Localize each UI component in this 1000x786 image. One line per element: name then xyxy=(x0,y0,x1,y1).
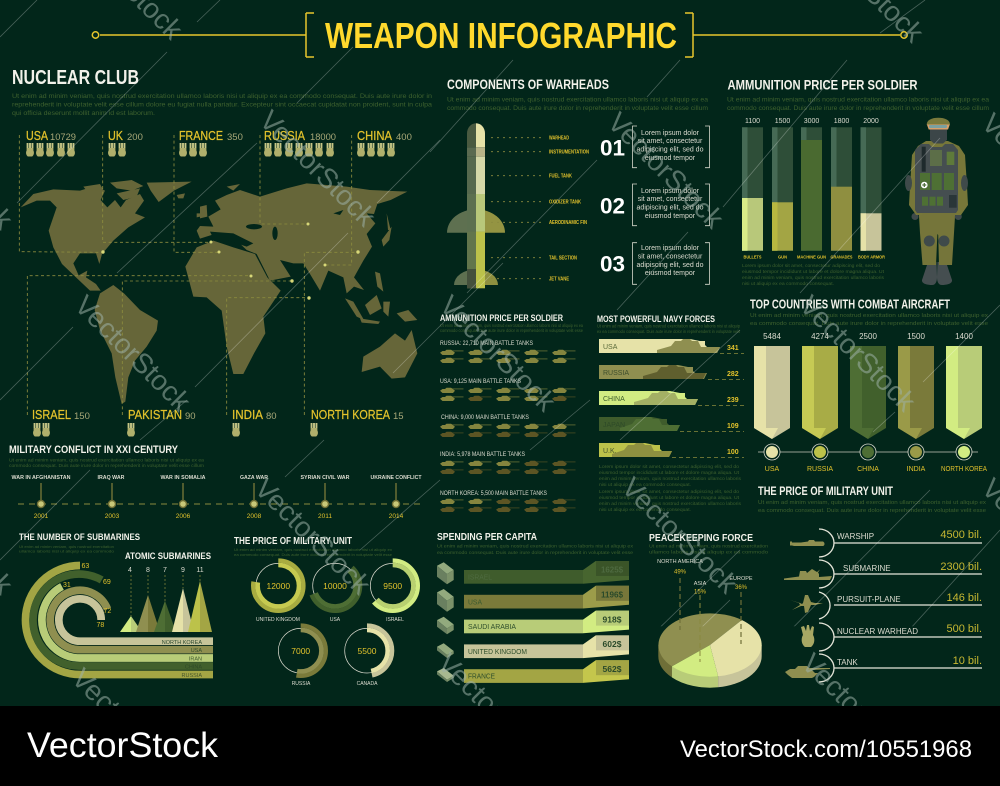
numbered callouts: Lorem ipsum dolor xyxy=(641,245,700,252)
donut: Israel: 9500 xyxy=(383,581,402,591)
nested arc chart: 78 xyxy=(96,622,104,629)
donut: Israel xyxy=(368,561,418,623)
label: France: 350 xyxy=(227,132,243,143)
label: Pakistan: 90 xyxy=(185,411,196,422)
row: USA: 1196$ xyxy=(601,590,623,600)
navy bar: China: 239 xyxy=(727,397,739,404)
navy bar: Japan: JAPAN xyxy=(603,422,625,429)
donut: Israel: ISRAEL xyxy=(386,617,404,623)
label: India: 80 xyxy=(266,411,277,422)
tank row: China: CHINA: 9,000 MAIN BATTLE TANKS xyxy=(441,415,529,421)
heading: THE PRICE OF MILITARY UNIT xyxy=(758,484,894,498)
text block: Ut enim ad minim veniam, quis nostrud exercitation ullamco laboris nisi ut aliquip ex ea xyxy=(447,98,709,104)
text block: navy notes: eiusmod tempor incididunt ut labore et dolore magna aliqua. Ut xyxy=(599,470,740,476)
triangle chart: 9 xyxy=(181,567,185,574)
nested arc chart xyxy=(25,563,213,679)
text block: Ut enim ad minim veniam, quis nostrud exercitation ullamco laboris nisi ut aliquip ex xyxy=(234,547,392,552)
donut: Canada xyxy=(342,626,392,687)
panel: military conflict timeline xyxy=(9,444,422,520)
numbered callouts: eiusmod tempor xyxy=(645,270,696,277)
text block: chart note: nisi ut aliquip ex ea commodo consequat. xyxy=(742,281,834,286)
navy bar: USA: USA xyxy=(603,344,618,351)
row: nuclear warhead xyxy=(801,623,982,651)
country axis: NORTH KOREA xyxy=(941,466,987,473)
donut: USA: USA xyxy=(330,617,341,623)
tank row: Russia: RUSSIA: 22,710 MAIN BATTLE TANKS xyxy=(440,341,533,347)
numbered callouts: adipiscing elit, sed do xyxy=(637,146,704,154)
numbered callouts: Lorem ipsum dolor xyxy=(641,130,700,137)
timeline: 2014 xyxy=(389,513,404,520)
bar chart: 1100 xyxy=(745,118,760,125)
title: WEAPON INFOGRAPHIC xyxy=(325,15,677,56)
label: USA xyxy=(26,129,76,156)
watermark diagonals xyxy=(0,0,1000,626)
text block: Ut enim ad minim veniam, quis nostrud exercitation ullamco laboris nisi ut aliquip ex xyxy=(437,544,634,550)
triangle chart: 11 xyxy=(196,567,204,574)
footer brand: VectorStock xyxy=(27,726,219,765)
text block xyxy=(750,313,988,327)
label: France xyxy=(179,129,243,156)
text block xyxy=(19,544,114,554)
donut: United Kingdom: 12000 xyxy=(266,581,290,591)
text block: Ut enim ad minim veniam, quis nostrud exercitation ullamco laboris nisi ut aliquip ex ea xyxy=(727,98,990,104)
panel: the price of military unit (donuts) xyxy=(234,536,418,687)
donut: Russia: 7000 xyxy=(291,646,310,656)
bar chart: GRANADES xyxy=(830,254,853,260)
text block xyxy=(9,458,205,468)
nested arc chart: USA xyxy=(191,648,202,654)
heading: AMMUNITION PRICE PER SOLDIER xyxy=(440,313,563,324)
footer bar xyxy=(0,706,1000,786)
text block: navy notes: Lorem ipsum dolor sit amet, consectetur adipiscing elit, sed do xyxy=(599,464,739,470)
text block: navy notes: nisi ut aliquip ex ea commodo consequat. xyxy=(599,482,691,488)
watermark text: VectorStock xyxy=(254,104,382,233)
bar chart: 2000 xyxy=(863,118,879,125)
bar chart: GUN xyxy=(778,254,787,260)
label: China: 400 xyxy=(396,132,412,143)
text block: nuclear club intro: reprehenderit in voluptate velit esse cillum dolore eu fugiat nulla pariatur. Excepteur sint occaecat cupidatat non proident, sunt in culpa xyxy=(12,102,433,108)
label: USA: 10729 xyxy=(50,132,76,143)
row: France: FRANCE xyxy=(468,672,495,681)
pie chart: NORTH AMERICA xyxy=(657,559,703,565)
navy bar: UK: U.K. xyxy=(603,448,617,455)
row: United Kingdom: UNITED KINGDOM xyxy=(468,647,527,656)
text block: ea commodo consequat. Duis aute irure dolor in reprehenderit in voluptate velit esse xyxy=(750,321,988,327)
ribbon chart: 1500 xyxy=(907,332,925,341)
panel: peacekeeping force xyxy=(649,532,769,688)
row: nuclear warhead: 500 bil. xyxy=(947,623,982,635)
navy bar: Japan: 109 xyxy=(727,423,739,430)
row: United Kingdom xyxy=(437,635,629,658)
row: Saudi Arabia: 918$ xyxy=(602,614,622,624)
heading: SPENDING PER CAPITA xyxy=(437,531,537,543)
panel: ammunition price per soldier xyxy=(727,76,990,286)
text block: nuclear club intro xyxy=(12,93,433,117)
text block: commodo consequat. Duis aute irure dolor in reprehenderit in voluptate velit esse xyxy=(440,328,583,333)
donut: United Kingdom: UNITED KINGDOM xyxy=(256,617,300,623)
donut: USA xyxy=(300,550,370,623)
numbered callouts: Lorem ipsum dolor xyxy=(641,188,700,195)
navy bar: China xyxy=(599,391,744,406)
tank row: USA xyxy=(440,379,576,401)
row: Saudi Arabia xyxy=(437,611,629,634)
text block: Ut enim ad minim veniam, quis nostrud exercitation xyxy=(19,544,114,549)
text block: ullamco laboris nisi ut aliquip ex ea commodo xyxy=(19,548,114,554)
donut: USA: 10000 xyxy=(323,581,347,591)
timeline: GAZA WAR xyxy=(240,475,268,481)
text block: ea commodo consequat. Duis aute irure dolor in reprehenderit in voluptate velit esse xyxy=(437,550,633,556)
triangle chart: 4 xyxy=(128,567,132,574)
label: Israel xyxy=(32,408,90,436)
footer url: VectorStock.com/10551968 xyxy=(680,736,972,763)
donut: Canada: 5500 xyxy=(358,646,377,656)
numbered callouts: 01 xyxy=(600,136,625,160)
bar chart xyxy=(742,118,885,260)
row: pursuit-plane xyxy=(790,592,982,619)
nested arc chart: NORTH KOREA xyxy=(162,640,202,646)
text block: Ut enim ad minim veniam, quis nostrud exercitation xyxy=(649,544,769,548)
missile part labels: JET VANE xyxy=(549,276,570,282)
timeline: IRAQ WAR xyxy=(98,475,125,481)
label: Israel: ISRAEL xyxy=(32,408,71,422)
text block xyxy=(440,323,583,333)
nested arc chart: 63 xyxy=(82,563,89,570)
navy bar: China: CHINA xyxy=(603,396,625,403)
numbered callouts: 03 xyxy=(600,252,625,276)
navy bar: UK: 100 xyxy=(727,449,739,456)
text block: Ut enim ad minim veniam, quis nostrud exercitation ullamco laboris nisi ut aliquip ex xyxy=(750,313,988,319)
timeline: WAR IN SOMALIA xyxy=(160,475,206,481)
row: France: 562$ xyxy=(602,664,622,674)
label: UK xyxy=(108,129,143,156)
numbered callouts: 02 xyxy=(600,194,625,218)
bar chart: MACHINE GUN xyxy=(797,254,826,260)
tank row: North Korea: NORTH KOREA: 5,500 MAIN BATTLE TANKS xyxy=(440,491,547,497)
row: Israel: 1625$ xyxy=(601,565,623,575)
pie chart xyxy=(657,559,762,688)
missile diagram xyxy=(447,123,505,288)
text block: commodo consequat. Duis aute irure dolor in reprehenderit in voluptate velit esse cillum xyxy=(447,106,708,112)
pie chart: 49% xyxy=(674,570,687,576)
timeline: WAR IN AFGHANISTAN xyxy=(12,475,71,481)
timeline: SYRIAN CIVIL WAR xyxy=(300,475,350,481)
text block: Ut enim ad minim veniam, quis nostrud exercitation ullamco laboris nisi ut aliquip ex ea xyxy=(440,323,583,328)
ribbon chart: 4274 xyxy=(811,332,829,341)
text block: ullamco laboris nisi ut aliquip ex ea commodo xyxy=(649,550,769,554)
numbered callouts xyxy=(600,126,710,284)
text block: nuclear club intro: Ut enim ad minim veniam, quis nostrud exercitation ullamco laboris nisi ut aliquip ex ea commodo consequat. Duis aute irure dolor in xyxy=(12,93,433,100)
text block: chart note: eiusmod tempor incididunt ut labore et dolore magna aliqua. Ut xyxy=(742,269,885,274)
heading: MILITARY CONFLICT IN XXI CENTURY xyxy=(9,444,179,456)
heading: atomic submarines: ATOMIC SUBMARINES xyxy=(125,551,211,562)
label: China: CHINA xyxy=(357,129,393,143)
row: pursuit-plane: PURSUIT-PLANE xyxy=(837,595,901,604)
navy bar: Russia xyxy=(599,365,744,380)
row: nuclear warhead: NUCLEAR WARHEAD xyxy=(837,627,918,636)
heading: THE PRICE OF MILITARY UNIT xyxy=(234,536,352,547)
missile part labels xyxy=(491,136,589,282)
nested arc chart: RUSSIA xyxy=(182,673,202,679)
row: submarine: SUBMARINE xyxy=(843,564,891,573)
label: USA: USA xyxy=(26,129,49,143)
bar chart: BULLETS xyxy=(744,254,762,260)
label: UK: 200 xyxy=(127,132,143,143)
text block: Ut enim ad minim veniam, quis nostrud exercitation ullamco laboris nisi ut aliquip xyxy=(597,324,740,328)
label: North Korea xyxy=(310,408,404,436)
navy bar: Russia: 282 xyxy=(727,371,739,378)
text block: navy notes: enim ad minim veniam, quis nostrud exercitation ullamco laboris xyxy=(599,501,742,507)
text block: ea commodo consequat. Duis aute irure dolor in reprehenderit in voluptate velit esse xyxy=(758,508,986,514)
text block: ex ea commodo consequat. Duis aute irure dolor in reprehenderit in voluptate velit xyxy=(597,329,741,334)
watermark text: VectorStock xyxy=(432,647,560,776)
watermark text: VectorStock xyxy=(434,289,562,418)
country labels: nuclear warheads xyxy=(26,129,412,436)
missile part labels: AERODINAMIC FIN xyxy=(549,220,587,226)
text block: chart note xyxy=(742,263,885,286)
text block: nuclear club intro: qui officia deserunt mollit anim id est laborum. xyxy=(12,110,155,117)
nested arc chart: 72 xyxy=(104,608,111,615)
title xyxy=(92,13,907,57)
timeline: 2008 xyxy=(247,513,262,520)
country axis: CHINA xyxy=(857,466,879,473)
bar chart: 1800 xyxy=(834,118,849,125)
heading: COMPONENTS OF WARHEADS xyxy=(447,77,609,92)
ribbon chart: 5484 xyxy=(763,332,781,341)
text block xyxy=(447,98,709,112)
ribbon chart: 1400 xyxy=(955,332,973,341)
ribbon chart xyxy=(754,332,982,439)
label: China xyxy=(357,129,412,156)
nested arc chart: IRAN xyxy=(189,656,202,662)
panel: spending per capita xyxy=(437,531,634,683)
nested arc chart: 31 xyxy=(63,582,71,589)
label: Pakistan: PAKISTAN xyxy=(128,408,182,422)
watermark text: VectorStock xyxy=(796,647,924,776)
watermark text: VectorStock xyxy=(69,289,197,418)
nested arc chart: CHINA xyxy=(185,664,202,670)
donut: Russia: RUSSIA xyxy=(292,681,311,687)
heading: PEACEKEEPING FORCE xyxy=(649,532,753,544)
numbered callouts: sit amet, consectetur xyxy=(638,138,703,145)
row: USA: USA xyxy=(468,597,482,606)
country axis: RUSSIA xyxy=(807,466,833,473)
panel: ammunition price per soldier (tanks) xyxy=(440,313,583,512)
navy bar: Russia: RUSSIA xyxy=(603,370,629,377)
watermark text: VectorStock xyxy=(249,472,377,601)
heading: THE NUMBER OF SUBMARINES xyxy=(19,532,140,543)
navy bar: Japan xyxy=(599,417,744,432)
tank row: India: INDIA: 5,978 MAIN BATTLE TANKS xyxy=(440,452,525,458)
label: India xyxy=(232,408,277,436)
numbered callouts: eiusmod tempor xyxy=(645,213,696,220)
triangle chart: 8 xyxy=(146,567,150,574)
donut: United Kingdom xyxy=(253,561,303,623)
numbered callouts: sit amet, consectetur xyxy=(638,254,703,260)
text block: Ut enim ad minim veniam, quis nostrud exercitation ullamco laboris nisi ut aliquip ex ea xyxy=(9,458,205,462)
panel: top countries with combat aircraft xyxy=(750,298,988,473)
label: France: FRANCE xyxy=(179,129,223,143)
label: Israel: 150 xyxy=(74,411,90,422)
row: France xyxy=(437,660,629,683)
heading: AMMUNITION PRICE PER SOLDIER xyxy=(728,76,918,92)
donut: Russia xyxy=(276,626,326,687)
row: Israel: ISRAEL xyxy=(468,572,492,582)
text block: chart note: enim ad minim veniam, quis nostrud exercitation ullamco laboris xyxy=(742,275,885,280)
row: tank: 10 bil. xyxy=(953,655,982,667)
timeline: 2003 xyxy=(105,513,120,520)
timeline: 2001 xyxy=(34,513,49,520)
pie chart: 36% xyxy=(735,585,748,591)
triangle chart xyxy=(120,567,212,632)
text block: ea commodo consequat. Duis aute irure dolor in reprehenderit in voluptate velit esse xyxy=(234,552,392,557)
row: Israel xyxy=(437,561,629,584)
row: USA xyxy=(437,586,629,612)
text block: Ut enim ad minim veniam, quis nostrud exercitation ullamco laboris nisi ut aliquip ex xyxy=(758,500,986,506)
nested arc chart: 69 xyxy=(103,579,111,586)
text block xyxy=(649,544,769,554)
connector lines and map dots xyxy=(19,135,360,415)
row: submarine: 2300 bil. xyxy=(940,561,982,573)
heading: MOST POWERFUL NAVY FORCES xyxy=(597,314,715,325)
tank row: USA: USA: 9,125 MAIN BATTLE TANKS xyxy=(440,379,521,385)
label: Russia: RUSSIA xyxy=(264,129,306,143)
label: North Korea: NORTH KOREA xyxy=(311,408,391,422)
pie chart: EUROPE xyxy=(729,576,753,582)
row: warship: WARSHIP xyxy=(837,532,874,541)
text block: navy notes: Lorem ipsum dolor sit amet, consectetur adipiscing elit, sed do xyxy=(599,489,739,495)
heading: nuclear club: NUCLEAR CLUB xyxy=(12,67,139,89)
row: tank xyxy=(785,654,982,682)
row: United Kingdom: 602$ xyxy=(602,639,622,649)
numbered callouts: adipiscing elit, sed do xyxy=(637,204,704,212)
timeline xyxy=(12,475,422,520)
ribbon chart: 2500 xyxy=(859,332,877,341)
label: India: INDIA xyxy=(232,408,264,422)
text block xyxy=(758,500,986,514)
row: Saudi Arabia: SAUDI ARABIA xyxy=(468,622,516,631)
label: UK: UK xyxy=(108,129,124,143)
pie chart: ASIA xyxy=(694,581,707,587)
text block xyxy=(437,544,634,556)
row: pursuit-plane: 146 bil. xyxy=(947,592,982,604)
icon: soldier xyxy=(905,118,968,285)
label: Russia: 18000 xyxy=(310,132,336,143)
tank row: North Korea xyxy=(440,491,576,512)
bar chart: 3000 xyxy=(804,118,819,125)
text block xyxy=(727,98,990,112)
missile part labels: WARHEAD xyxy=(549,136,569,142)
numbered callouts: adipiscing elit, sed do xyxy=(637,262,704,269)
label: Russia xyxy=(264,129,336,156)
tank row: China xyxy=(440,415,576,437)
timeline: UKRAINE CONFLICT xyxy=(370,475,422,481)
panel: most powerful navy forces xyxy=(597,314,744,513)
bar chart: 1500 xyxy=(775,118,790,125)
text block xyxy=(234,547,392,557)
country axis xyxy=(758,444,987,473)
text block xyxy=(597,324,741,334)
text block: navy notes: eiusmod tempor incididunt ut labore et dolore magna aliqua. Ut xyxy=(599,495,740,501)
missile part labels: INSTRUMENTATION xyxy=(549,150,589,156)
timeline: 2006 xyxy=(176,513,191,520)
panel: components of warheads xyxy=(447,77,710,288)
row: submarine xyxy=(784,560,982,588)
watermark text: VectorStock xyxy=(602,106,730,235)
text block: navy notes: enim ad minim veniam, quis nostrud exercitation ullamco laboris xyxy=(599,476,742,482)
navy bar: UK xyxy=(599,443,744,458)
missile part labels: OXIDIZER TANK xyxy=(549,200,581,206)
text block: navy notes: nisi ut aliquip ex ea commodo consequat. xyxy=(599,507,691,513)
pie chart: 15% xyxy=(694,590,707,596)
missile part labels: TAIL SECTION xyxy=(549,256,577,262)
country axis: USA xyxy=(765,466,780,473)
text block: chart note: Lorem ipsum dolor sit amet, consectetur adipiscing elit, sed do xyxy=(742,263,880,268)
row: warship: 4500 bil. xyxy=(940,529,982,541)
navy bar: USA xyxy=(599,339,744,354)
watermark text: VectorStock xyxy=(794,289,922,418)
bar chart: BODY ARMOR xyxy=(858,254,885,260)
label: North Korea: 15 xyxy=(393,411,404,422)
country axis: INDIA xyxy=(907,466,926,473)
missile part labels: FUEL TANK xyxy=(549,174,572,180)
numbered callouts: sit amet, consectetur xyxy=(638,196,703,203)
tank row: India xyxy=(440,452,576,474)
timeline: 2011 xyxy=(318,513,332,520)
text block: navy notes xyxy=(599,464,742,513)
donut: Canada: CANADA xyxy=(357,681,378,687)
text block: commodo consequat. Duis aute irure dolor in reprehenderit in voluptate velit esse cillum xyxy=(9,463,204,468)
row: tank: TANK xyxy=(837,658,858,667)
panel: nuclear club xyxy=(12,67,433,436)
text block: commodo consequat. Duis aute irure dolor in reprehenderit in voluptate velit esse cillum xyxy=(727,106,989,112)
triangle chart: 7 xyxy=(163,567,167,574)
label: Pakistan xyxy=(127,408,196,436)
world map xyxy=(21,180,417,404)
row: warship xyxy=(790,529,982,557)
tank row: Russia xyxy=(440,341,576,363)
watermark text: VectorStock xyxy=(616,471,744,600)
panel: the price of military unit (list) xyxy=(758,484,986,682)
numbered callouts: eiusmod tempor xyxy=(645,155,696,162)
panel: the number of submarines xyxy=(19,532,213,679)
navy bar: USA: 341 xyxy=(727,345,739,352)
